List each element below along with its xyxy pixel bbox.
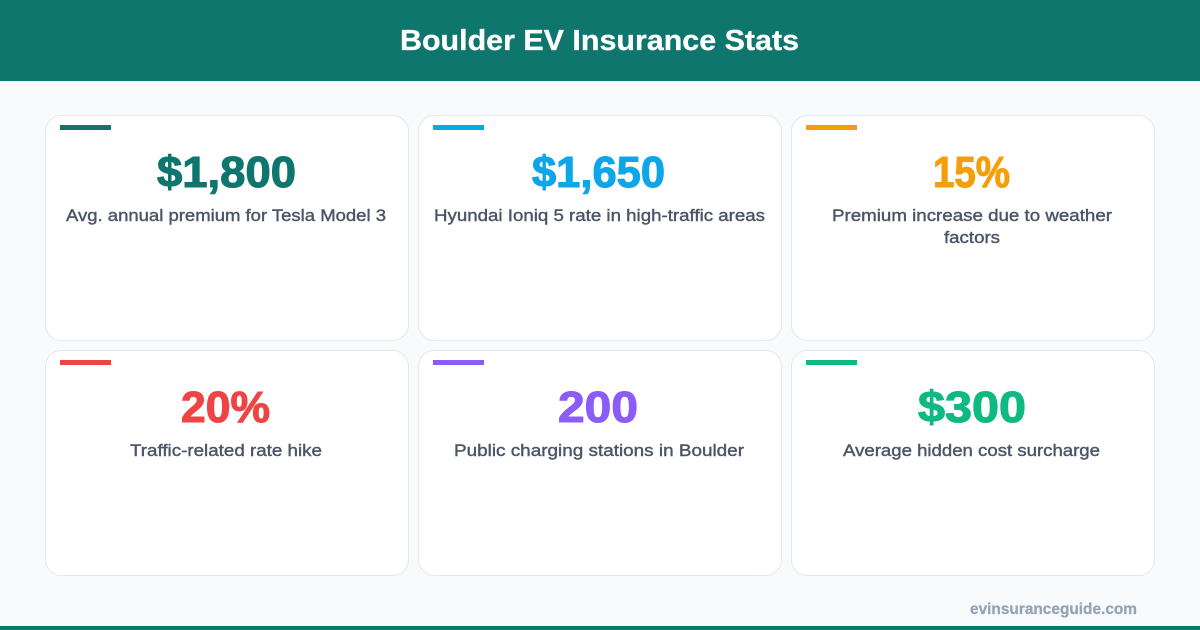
title: Boulder EV Insurance Stats [400,25,799,57]
panel: weather increase [792,116,1154,340]
stat: $1,650: $1,650 [532,148,665,197]
footer band [0,626,1200,630]
stat: 20%: 20% [181,383,270,432]
panel: Tesla Model 3 premium [46,116,408,340]
footer site name: evinsuranceguide.com [970,601,1137,618]
stat: 15%: 15% [933,148,1010,197]
panel: charging stations [418,350,782,576]
label: Ioniq rate: Hyundai Ioniq 5 rate in high-traffic areas [434,206,765,225]
label: weather factors: factors [944,228,1000,247]
label: surcharge: Average hidden cost surcharge [843,441,1100,460]
label: weather factors [832,206,1112,247]
label: traffic hike: Traffic-related rate hike [130,441,322,460]
panel: Hyundai Ioniq 5 rate [418,116,782,340]
label: Tesla premium: Avg. annual premium for Tesla Model 3 [66,206,386,225]
label: charging stations: Public charging stations in Boulder [454,441,744,460]
panel: traffic rate hike [46,350,408,576]
panel: hidden cost surcharge [792,350,1154,576]
stat: $300: $300 [918,383,1026,432]
label: weather factors: Premium increase due to weather [832,206,1112,225]
stat: 200: 200 [558,383,638,432]
header band with title [0,0,1200,81]
stat: $1,800: $1,800 [157,148,296,197]
